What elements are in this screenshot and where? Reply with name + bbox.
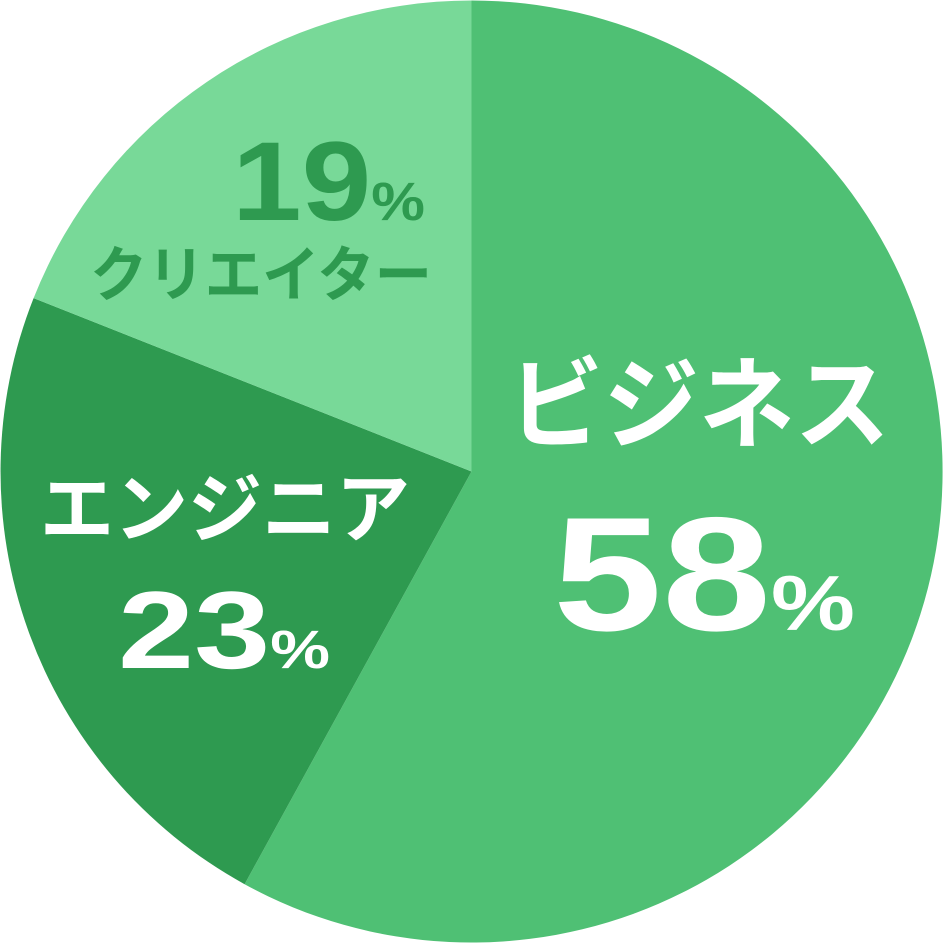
label: creator: 19 %	[232, 119, 425, 244]
slice: business 58%	[245, 0, 943, 942]
slice: engineer 23%	[1, 298, 472, 884]
label: engineer: 23 %	[118, 569, 330, 692]
label: business: ビジネス	[508, 350, 890, 462]
label: creator	[90, 119, 432, 309]
label: engineer	[40, 468, 410, 692]
label: engineer: エンジニア	[40, 468, 410, 553]
label: business: 58 %	[553, 484, 855, 665]
label: business	[508, 350, 890, 665]
slice: creator 19%	[34, 0, 471, 472]
label: creator: クリエイター	[90, 242, 432, 309]
